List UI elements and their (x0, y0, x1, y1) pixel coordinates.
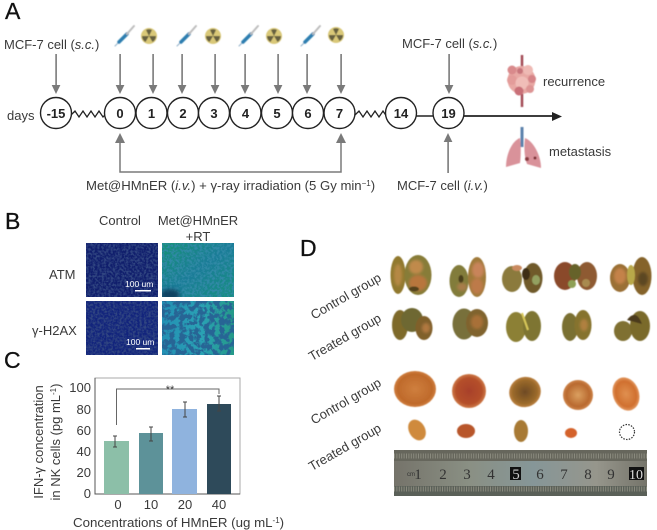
panel: C bar chart (4, 347, 284, 530)
error bars (113, 396, 221, 447)
y ticks: 100 (69, 380, 91, 395)
x ticks: 40 (212, 497, 226, 512)
day numbers: 4 (242, 106, 250, 121)
day numbers: 19 (441, 106, 456, 121)
day numbers: 14 (394, 106, 409, 121)
bracket arrow under days 0 to 7 (115, 133, 346, 172)
label: days: days (7, 108, 35, 123)
x axis title: -1 (273, 516, 280, 525)
ruler: 5 (512, 467, 520, 483)
day numbers: 1 (148, 106, 155, 121)
panel: A treatment timeline (4, 0, 612, 193)
day numbers: 5 (273, 106, 281, 121)
column label: Control: Control (99, 213, 141, 228)
chart frame (95, 378, 240, 494)
label: treated lungs: Treated group (306, 310, 384, 364)
y axis title: -1 (49, 387, 58, 395)
day numbers: 7 (336, 106, 343, 121)
ruler: 2 (439, 467, 447, 483)
ruler: 3 (463, 467, 471, 483)
y ticks (69, 380, 91, 501)
y ticks: 60 (77, 423, 91, 438)
label: treatment: Met@HMnER (i.v.) + γ-ray irradiation (5 Gy min (86, 178, 362, 193)
ruler: 8 (584, 467, 592, 483)
day numbers: 2 (179, 106, 187, 121)
day numbers: -15 (47, 106, 65, 121)
micrograph: ATM control: 100 um (125, 279, 153, 289)
panel: B immunofluorescence (5, 208, 238, 355)
label: recurrence: recurrence (543, 74, 605, 89)
ruler: 10 (629, 468, 643, 483)
column label: Met@HMnER +RT: Met@HMnER (158, 213, 238, 228)
label: treatment: ) (371, 178, 375, 193)
y axis title: ) (48, 384, 63, 388)
dashed circle: no tumor (620, 424, 634, 440)
label: MCF-7 s.c. right: MCF-7 cell (s.c.) (402, 36, 497, 51)
label: treated tumors: Treated group (306, 420, 384, 474)
heading: B: B (5, 208, 20, 234)
day numbers (47, 106, 456, 121)
label: treatment: −1 (362, 179, 371, 188)
micrograph: γ-H2AX treated (162, 301, 234, 355)
grey downward arrows (52, 54, 453, 173)
ruler: cm (407, 472, 415, 478)
x ticks: 10 (144, 497, 158, 512)
column label: Met@HMnER +RT: +RT (186, 229, 210, 244)
icon: metastasis lungs (506, 127, 541, 168)
ruler: 1 (414, 467, 422, 483)
ruler (394, 450, 647, 496)
control lungs photos (390, 255, 652, 297)
y axis title: in NK cells (pg mL (48, 395, 63, 500)
y ticks: 0 (84, 486, 91, 501)
y ticks: 40 (77, 444, 91, 459)
treated lungs photos (392, 308, 650, 342)
ruler: 7 (560, 467, 568, 483)
label: control tumors: Control group (308, 375, 384, 427)
heading: D: D (300, 235, 317, 261)
row label: ATM: ATM (49, 267, 75, 282)
axes (95, 378, 240, 494)
micrograph: γ-H2AX control: 100 um (126, 337, 154, 347)
y ticks: 80 (77, 402, 91, 417)
x ticks (114, 497, 226, 512)
day numbers: 3 (210, 106, 218, 121)
syringe icons (115, 26, 320, 46)
x ticks: 20 (178, 497, 192, 512)
icon: recurrence tumor (507, 55, 536, 107)
micrograph: γ-H2AX control (86, 301, 158, 355)
label: control lungs: Control group (308, 270, 384, 322)
micrograph: ATM control (86, 243, 158, 297)
day numbers: 0 (116, 106, 124, 121)
panel: D organ photographs (300, 235, 652, 496)
timeline axis and squiggles (71, 111, 562, 121)
radiation icons (141, 27, 344, 44)
significance bracket (116, 389, 219, 425)
ruler: 9 (607, 467, 615, 483)
control tumors photos (394, 371, 644, 414)
ruler: 4 (487, 467, 495, 483)
treated tumors photos (405, 416, 577, 444)
label: metastasis: metastasis (549, 144, 612, 159)
x ticks: 0 (114, 497, 122, 512)
y axis title: IFN-γ concentration (31, 385, 46, 499)
label: MCF-7 s.c. left: MCF-7 cell (s.c.) (4, 37, 99, 52)
micrograph: ATM treated (160, 243, 234, 301)
y ticks: 20 (77, 465, 91, 480)
row label: γ-H2AX: γ-H2AX (32, 323, 77, 338)
y axis title (31, 384, 63, 500)
ruler: 6 (536, 467, 544, 483)
x axis title: ) (280, 515, 284, 530)
label: MCF-7 i.v.: MCF-7 cell (i.v.) (397, 178, 488, 193)
significance stars: ** (166, 384, 175, 396)
heading: C: C (4, 347, 21, 373)
bars (104, 404, 231, 494)
x axis title: Concentrations of HMnER (ug mL (73, 515, 273, 530)
day circles (40, 98, 464, 128)
day numbers: 6 (304, 106, 312, 121)
